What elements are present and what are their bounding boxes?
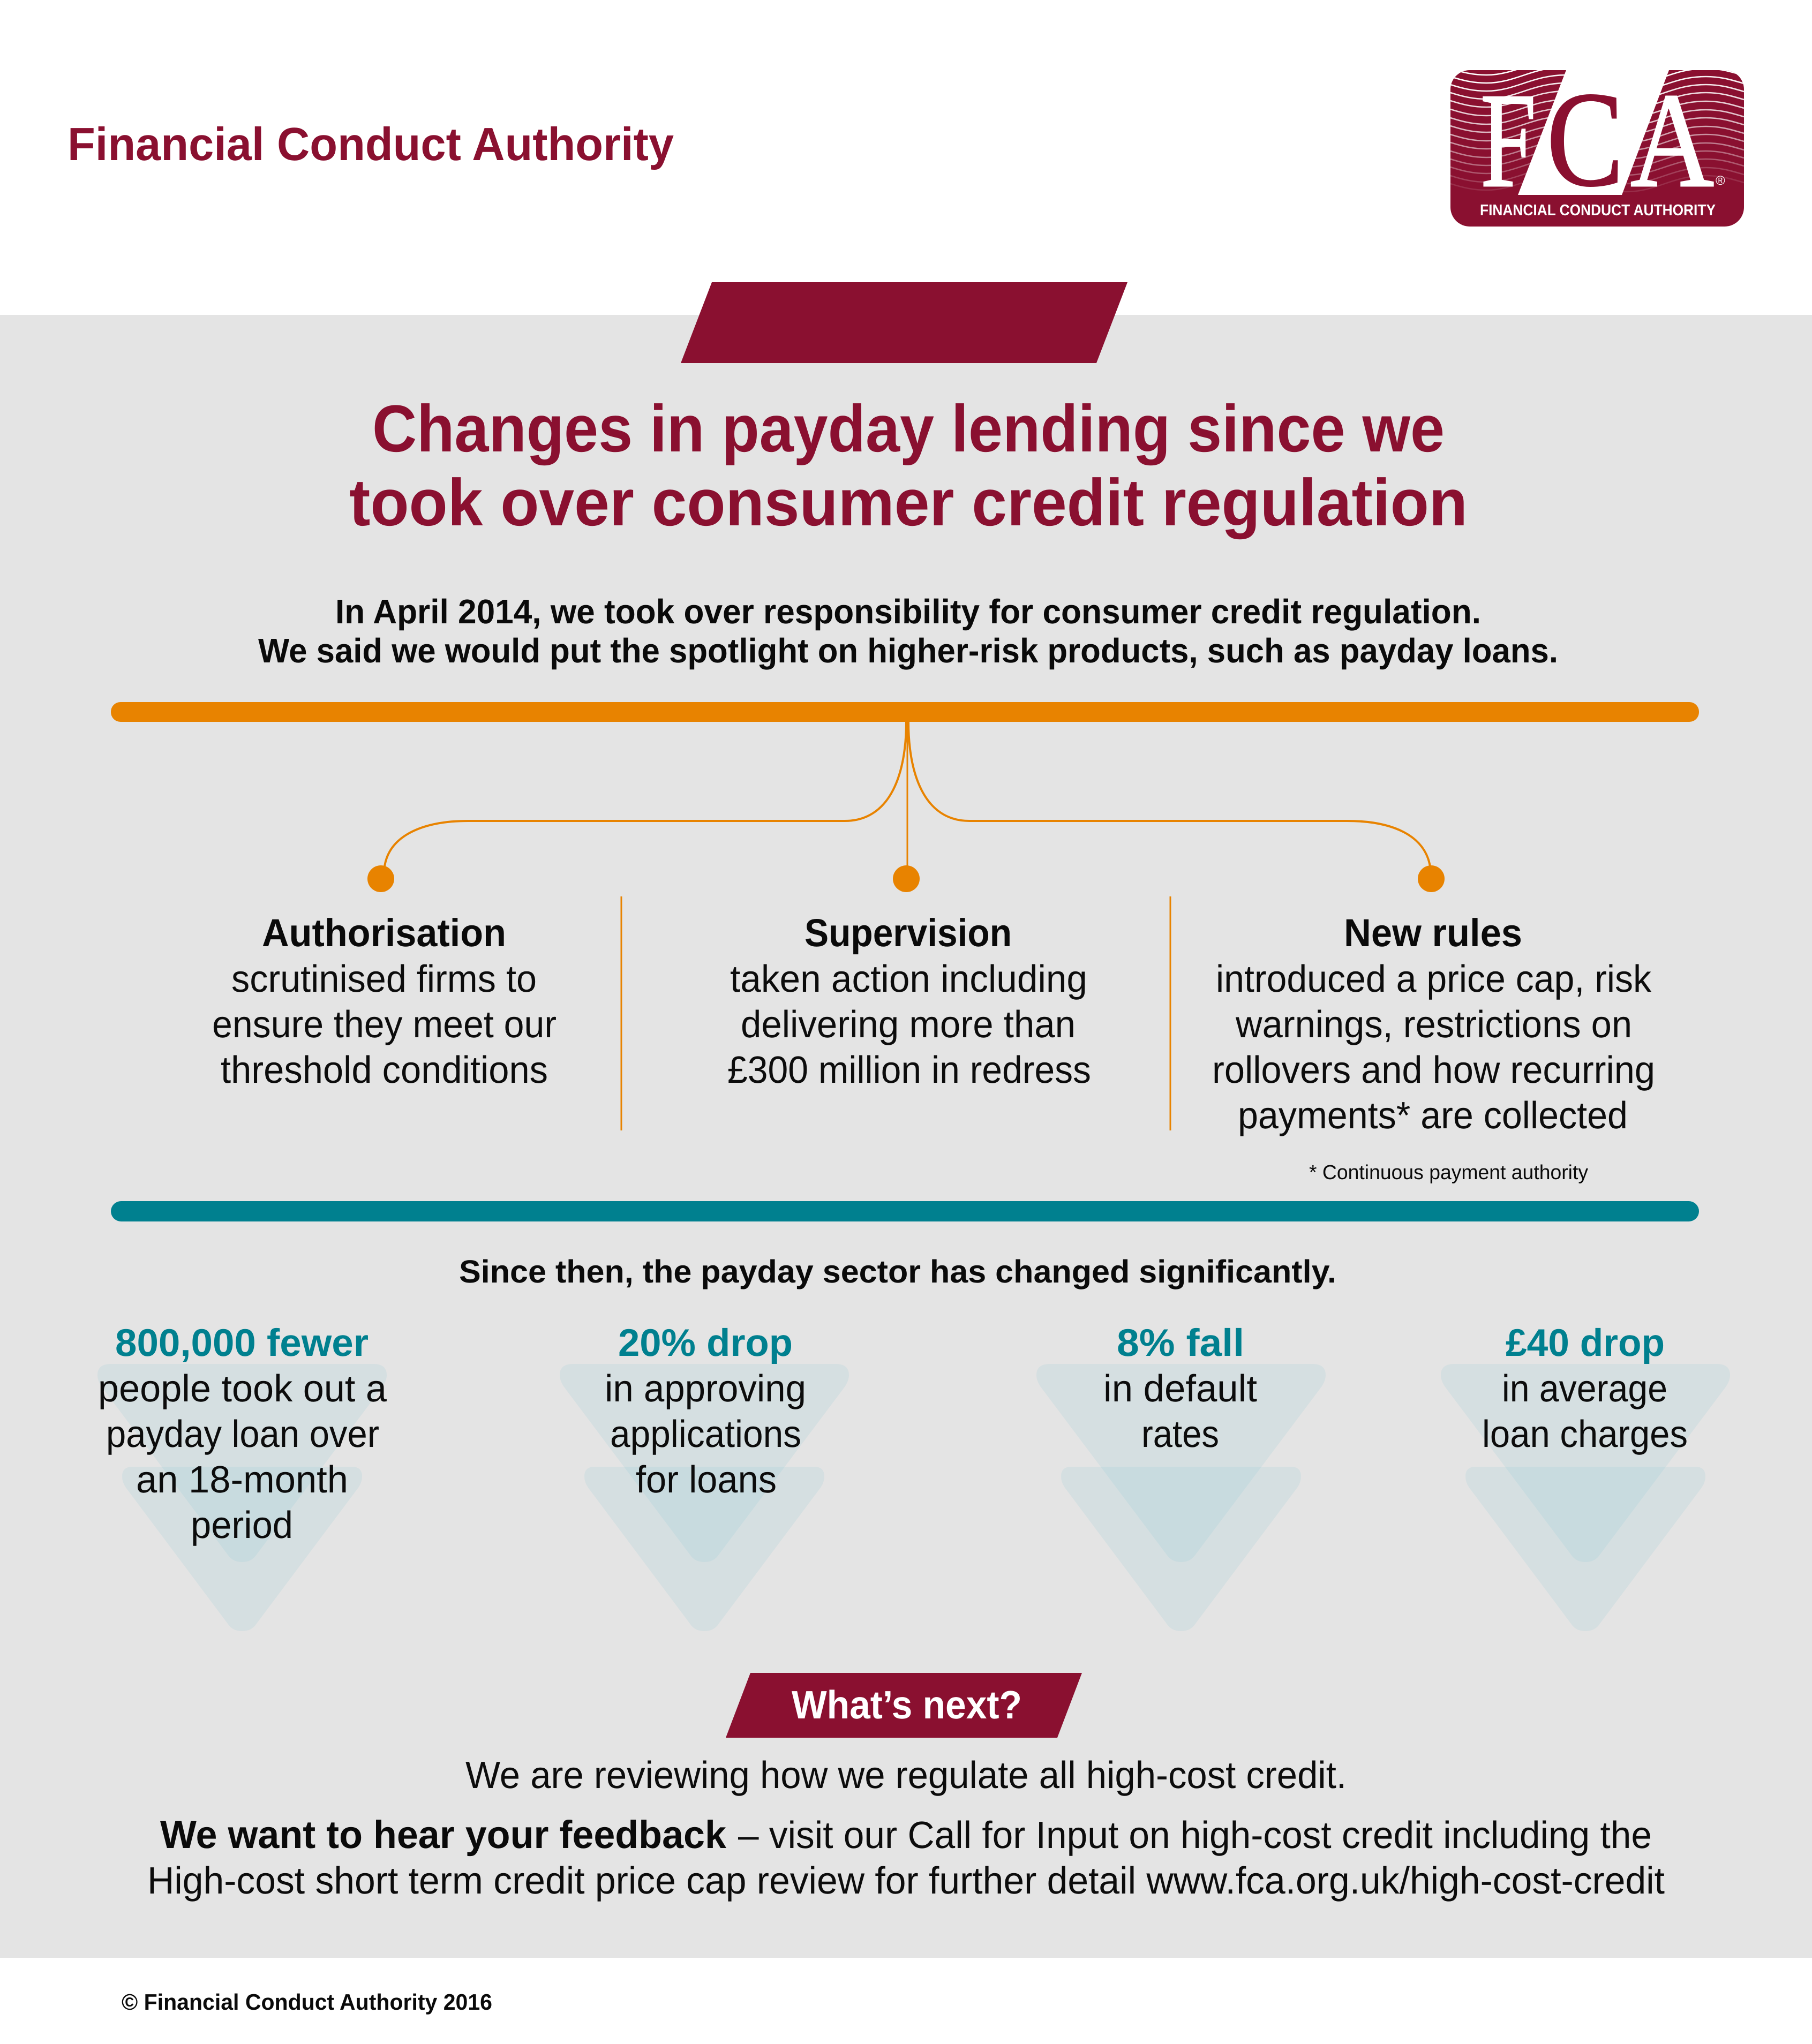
- intro text: [258, 592, 1558, 670]
- title: Changes in payday lending since we: [372, 392, 1445, 466]
- orange bar: [111, 702, 1699, 722]
- icon: FCA logo: FINANCIAL CONDUCT AUTHORITY: [1480, 202, 1716, 219]
- text block: Supervision: taken action including: [730, 958, 1087, 1000]
- icon: down arrows £40 drop: [1441, 1364, 1730, 1631]
- title: [349, 392, 1468, 540]
- text block: Authorisation: Authorisation: [262, 911, 506, 955]
- stat: 8% fall: in default: [1103, 1368, 1257, 1410]
- text block: Authorisation: ensure they meet our: [212, 1004, 557, 1046]
- text block: Supervision: Supervision: [805, 911, 1012, 955]
- icon: down arrows 20% drop: [560, 1364, 849, 1631]
- teal bar: [111, 1201, 1699, 1221]
- text block: New rules: payments* are collected: [1238, 1095, 1628, 1137]
- text block: New rules: New rules: [1344, 911, 1522, 955]
- text block: Supervision: delivering more than: [741, 1004, 1076, 1046]
- title tab: [681, 282, 1127, 363]
- icon: FCA logo: A: [1630, 65, 1714, 215]
- section intro: Since then, the payday sector has changed significantly.: [459, 1254, 1336, 1289]
- dot: Supervision: [893, 865, 920, 892]
- text block: Authorisation: scrutinised firms to: [231, 958, 537, 1000]
- icon: down arrows 800,000 fewer: [97, 1364, 387, 1631]
- stat: 800,000 fewer: [98, 1322, 387, 1547]
- icon: FCA logo: [1450, 59, 1744, 227]
- icon: FCA logo: ®: [1716, 174, 1725, 188]
- text block: call for feedback: We want to hear your feedback: [160, 1813, 726, 1857]
- icon: down arrows 8% fall: [1036, 1364, 1326, 1631]
- stat: £40 drop: loan charges: [1482, 1413, 1688, 1455]
- column dividers: [621, 896, 1170, 1130]
- stat: 20% drop: applications: [610, 1413, 801, 1455]
- dot: New rules: [1418, 865, 1445, 892]
- intro text: In April 2014, we took over responsibility for consumer credit regulation.: [335, 592, 1481, 631]
- stat: 8% fall: 8% fall: [1117, 1322, 1244, 1364]
- text block: New rules: [1212, 911, 1655, 1137]
- stat: 8% fall: [1103, 1322, 1257, 1455]
- icon: FCA logo: C: [1547, 64, 1623, 214]
- text block: call for feedback: High-cost short term credit price cap review for further detail www.fca.org.uk/high-cost-credit: [147, 1860, 1665, 1902]
- stat: £40 drop: [1482, 1322, 1688, 1455]
- stat: 20% drop: 20% drop: [618, 1322, 793, 1364]
- footer copyright: © Financial Conduct Authority 2016: [122, 1989, 492, 2015]
- stat: 800,000 fewer: 800,000 fewer: [115, 1322, 369, 1364]
- text block: New rules: introduced a price cap, risk: [1216, 958, 1651, 1000]
- text block: Supervision: £300 million in redress: [727, 1049, 1091, 1091]
- text block: Supervision: [727, 911, 1091, 1091]
- stat: £40 drop: in average: [1502, 1368, 1667, 1410]
- text block: review statement: We are reviewing how we regulate all high-cost credit.: [465, 1754, 1347, 1797]
- stat: 20% drop: in approving: [605, 1368, 806, 1410]
- text block: call for feedback: [147, 1813, 1665, 1902]
- text block: call for feedback: – visit our Call for Input on high-cost credit including the: [738, 1814, 1652, 1857]
- stat: 800,000 fewer: period: [191, 1504, 293, 1547]
- title: took over consumer credit regulation: [349, 466, 1468, 540]
- stat: 8% fall: rates: [1141, 1413, 1219, 1455]
- stat: 800,000 fewer: payday loan over: [106, 1413, 379, 1455]
- header organisation name: Financial Conduct Authority: [67, 118, 674, 170]
- text block: New rules: warnings, restrictions on: [1235, 1004, 1632, 1046]
- heading: What's next?: What’s next?: [792, 1683, 1022, 1727]
- stat: £40 drop: £40 drop: [1506, 1322, 1665, 1364]
- footnote: * Continuous payment authority: [1309, 1161, 1588, 1184]
- intro text: We said we would put the spotlight on higher-risk products, such as payday loans.: [258, 631, 1558, 670]
- heading: What's next?: [726, 1673, 1082, 1738]
- stat: 20% drop: [605, 1322, 806, 1501]
- dot: Authorisation: [367, 865, 394, 892]
- stat: 800,000 fewer: people took out a: [98, 1368, 387, 1410]
- stat: 800,000 fewer: an 18-month: [136, 1459, 348, 1501]
- connector lines from orange bar to three dots: [385, 722, 1430, 866]
- text block: Authorisation: threshold conditions: [221, 1049, 548, 1091]
- icon: FCA logo: F: [1480, 65, 1536, 215]
- text block: Authorisation: [212, 911, 557, 1091]
- stat: 20% drop: for loans: [636, 1459, 777, 1501]
- text block: New rules: rollovers and how recurring: [1212, 1049, 1655, 1091]
